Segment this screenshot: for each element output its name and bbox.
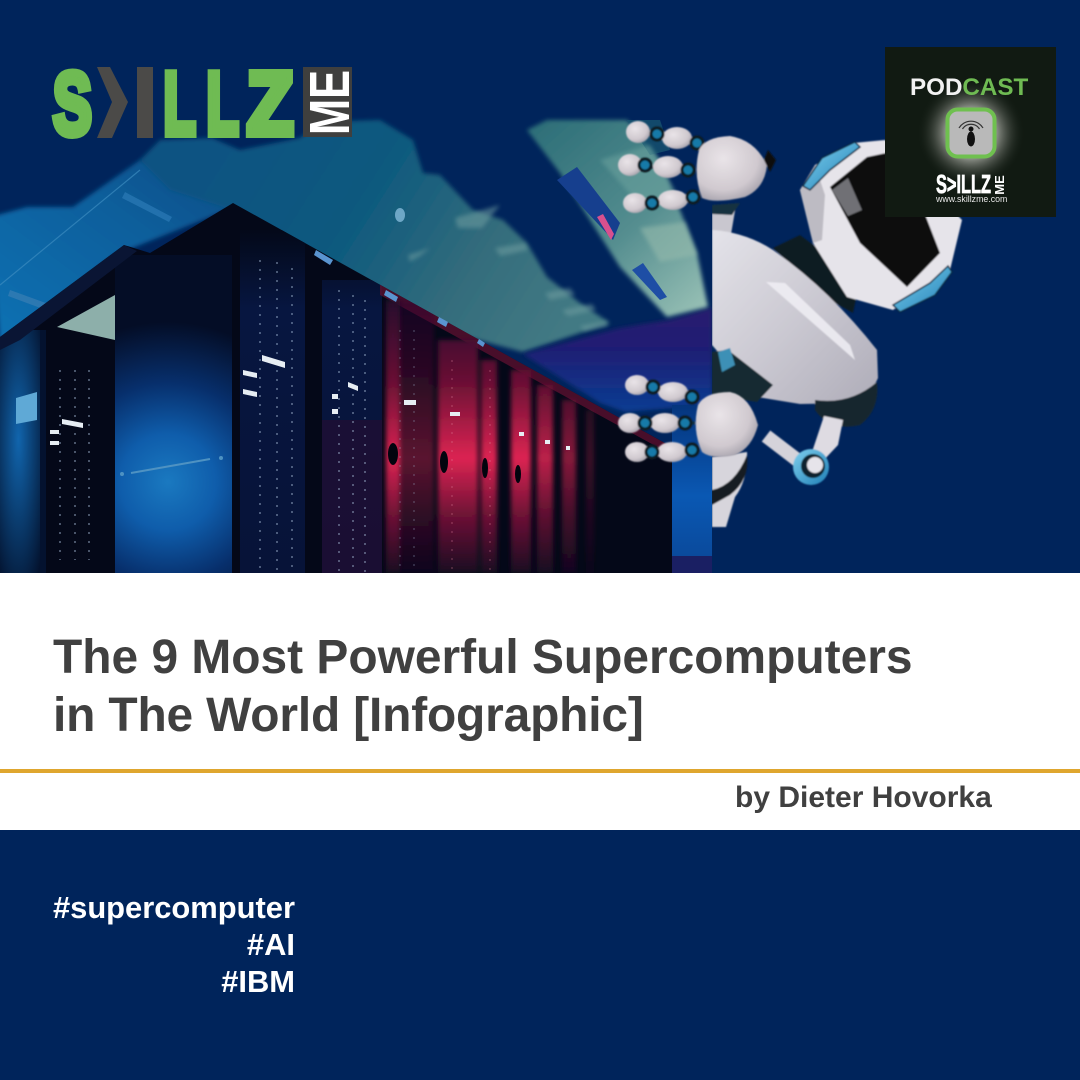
hashtags: #AI	[247, 927, 295, 962]
robot: torso	[712, 230, 878, 404]
robot: lower hand	[618, 375, 758, 462]
robot: wrist ring	[793, 449, 829, 485]
hashtags: #supercomputer	[53, 890, 295, 925]
hall scene	[0, 120, 712, 573]
white title band	[0, 573, 1080, 830]
top blue marker lights	[314, 250, 485, 347]
left rack glow	[0, 330, 40, 573]
title	[53, 631, 913, 742]
logo bar	[137, 67, 153, 138]
red glow columns	[386, 300, 594, 573]
rack blue tint	[240, 230, 305, 573]
logo: SKILLZ ME	[52, 62, 356, 142]
robot: helmet bands	[803, 142, 860, 190]
robot: head shell	[800, 140, 962, 310]
red top edge tint	[380, 283, 672, 455]
robot: lower torso dark joint	[815, 382, 877, 427]
robot body parts	[712, 140, 962, 527]
podcast icon	[924, 86, 1018, 180]
title: The 9 Most Powerful Supercomputers	[53, 631, 913, 684]
hero illustration: supercomputer hall and robot	[0, 117, 963, 573]
podcast logo badge: ME	[992, 175, 1007, 195]
ceiling light steps	[408, 205, 608, 331]
white LED bars	[50, 355, 570, 450]
ceiling details	[122, 192, 172, 222]
ceiling: teal cloud	[140, 120, 610, 352]
podcast badge	[885, 47, 1056, 217]
rack silhouettes	[0, 203, 672, 573]
podcast logo text: S>ILLZ	[936, 169, 991, 199]
podcast website: www.skillzme.com	[936, 194, 1007, 204]
logo chevron	[97, 67, 128, 138]
robot: visor	[830, 150, 940, 287]
podcast heading: PODCAST	[910, 74, 1028, 101]
left rack top frame	[0, 245, 137, 350]
title: in The World [Infographic]	[53, 689, 644, 742]
hashtags: #IBM	[221, 964, 295, 999]
blue panel	[115, 255, 232, 573]
background	[0, 0, 1080, 573]
ceiling: purple zone	[523, 308, 712, 412]
robot: lower body fragment	[712, 452, 747, 527]
byline: by Dieter Hovorka	[735, 781, 992, 814]
robot: upper arm	[712, 210, 736, 234]
gold divider	[0, 769, 1080, 773]
robot: neck	[773, 235, 860, 313]
rack end strip right	[672, 405, 712, 557]
ceiling: light panels upper right	[527, 120, 708, 317]
rack dotted LEDs	[60, 260, 490, 573]
ceiling: left blue glow	[0, 160, 240, 345]
teal panel by left rack	[57, 295, 115, 340]
robot: hip joint	[712, 350, 773, 402]
robot: upper hand	[618, 121, 776, 213]
logo letters	[53, 55, 293, 153]
robot: forearm	[812, 416, 843, 462]
hashtags	[53, 890, 295, 999]
